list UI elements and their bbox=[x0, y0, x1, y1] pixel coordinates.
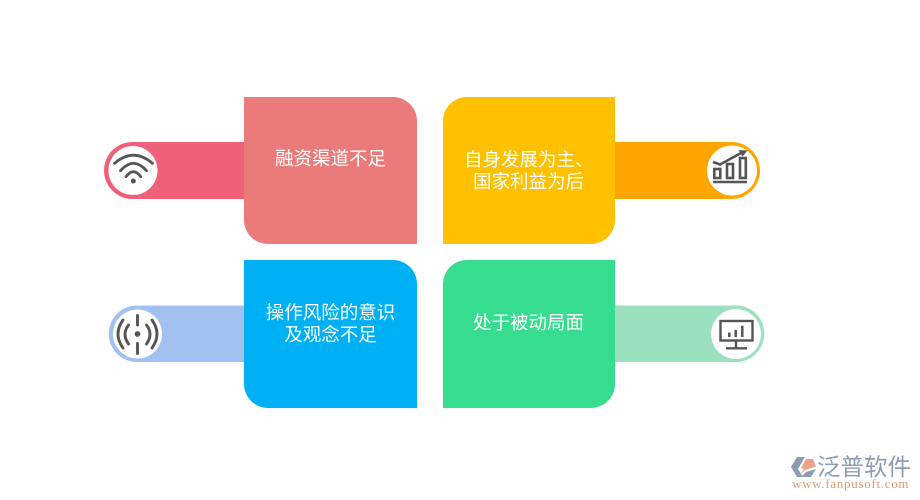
card: bottom left bbox=[244, 260, 417, 408]
card: bottom right bbox=[443, 260, 615, 408]
logo mark bbox=[791, 457, 816, 477]
pill: bottom right green bbox=[610, 306, 764, 362]
card: top left bbox=[244, 97, 417, 244]
logo url: www.fanpusoft.com bbox=[792, 476, 909, 491]
pill: bottom left blue bbox=[109, 306, 250, 362]
icon: rising bar chart bbox=[707, 146, 757, 196]
text: self development: 国家利益为后 bbox=[473, 171, 584, 192]
text: operational risk: 操作风险的意识 bbox=[266, 302, 395, 323]
text: operational risk bbox=[266, 302, 395, 345]
card: top right bbox=[443, 97, 615, 244]
text: financing channels: 融资渠道不足 bbox=[275, 148, 386, 169]
text: passive position: 处于被动局面 bbox=[473, 312, 584, 333]
pill: top left red bbox=[104, 142, 250, 199]
icon: wifi bbox=[108, 146, 158, 195]
text: operational risk: 及观念不足 bbox=[284, 324, 377, 345]
icon: broadcast signal bbox=[113, 310, 162, 358]
logo name: 泛普软件 bbox=[817, 454, 911, 480]
icon: monitor with chart bbox=[711, 309, 761, 359]
pill: top right orange bbox=[610, 142, 760, 199]
text: self development bbox=[464, 149, 594, 192]
text: self development: 自身发展为主、 bbox=[464, 149, 594, 170]
